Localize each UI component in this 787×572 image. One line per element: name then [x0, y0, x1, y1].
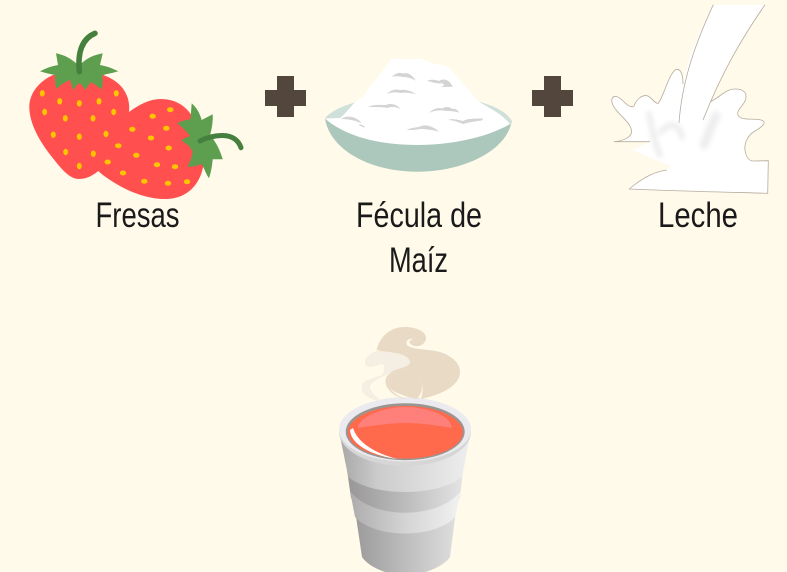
cup upper section	[340, 436, 470, 492]
icon: bowl of cornstarch	[325, 58, 512, 172]
icon: steam	[362, 327, 460, 401]
bowl body	[325, 118, 511, 172]
milk shading	[649, 114, 716, 155]
cup band	[350, 491, 461, 534]
drink highlight	[358, 407, 452, 428]
inner cup wall	[346, 403, 465, 460]
white crescent	[350, 428, 397, 459]
drink surface	[348, 406, 463, 459]
flour texture	[341, 73, 483, 132]
icon: plus sign 1	[265, 76, 306, 117]
strawberry left	[29, 33, 129, 179]
label: Fresas: Fresas	[96, 196, 180, 235]
steam light	[362, 351, 410, 401]
cup middle section	[347, 470, 463, 514]
cup rim	[339, 397, 471, 466]
icon: strawberries	[29, 33, 241, 199]
icon: milk splash	[612, 5, 768, 193]
icon: cup of atole	[339, 397, 471, 572]
label: Fécula de Maíz: Fécula de	[356, 196, 482, 235]
flour	[325, 58, 510, 145]
milk outline	[612, 5, 768, 193]
strawberry right	[98, 99, 241, 199]
label: Leche: Leche	[658, 196, 738, 235]
label: Fécula de Maíz	[356, 196, 482, 280]
icon: plus sign 2	[532, 76, 573, 117]
steam dark	[377, 327, 460, 399]
bowl back rim	[325, 94, 512, 140]
steam lower swirl	[388, 369, 422, 399]
cup lower section	[355, 510, 456, 572]
label: Fécula de Maíz: Maíz	[389, 241, 448, 280]
